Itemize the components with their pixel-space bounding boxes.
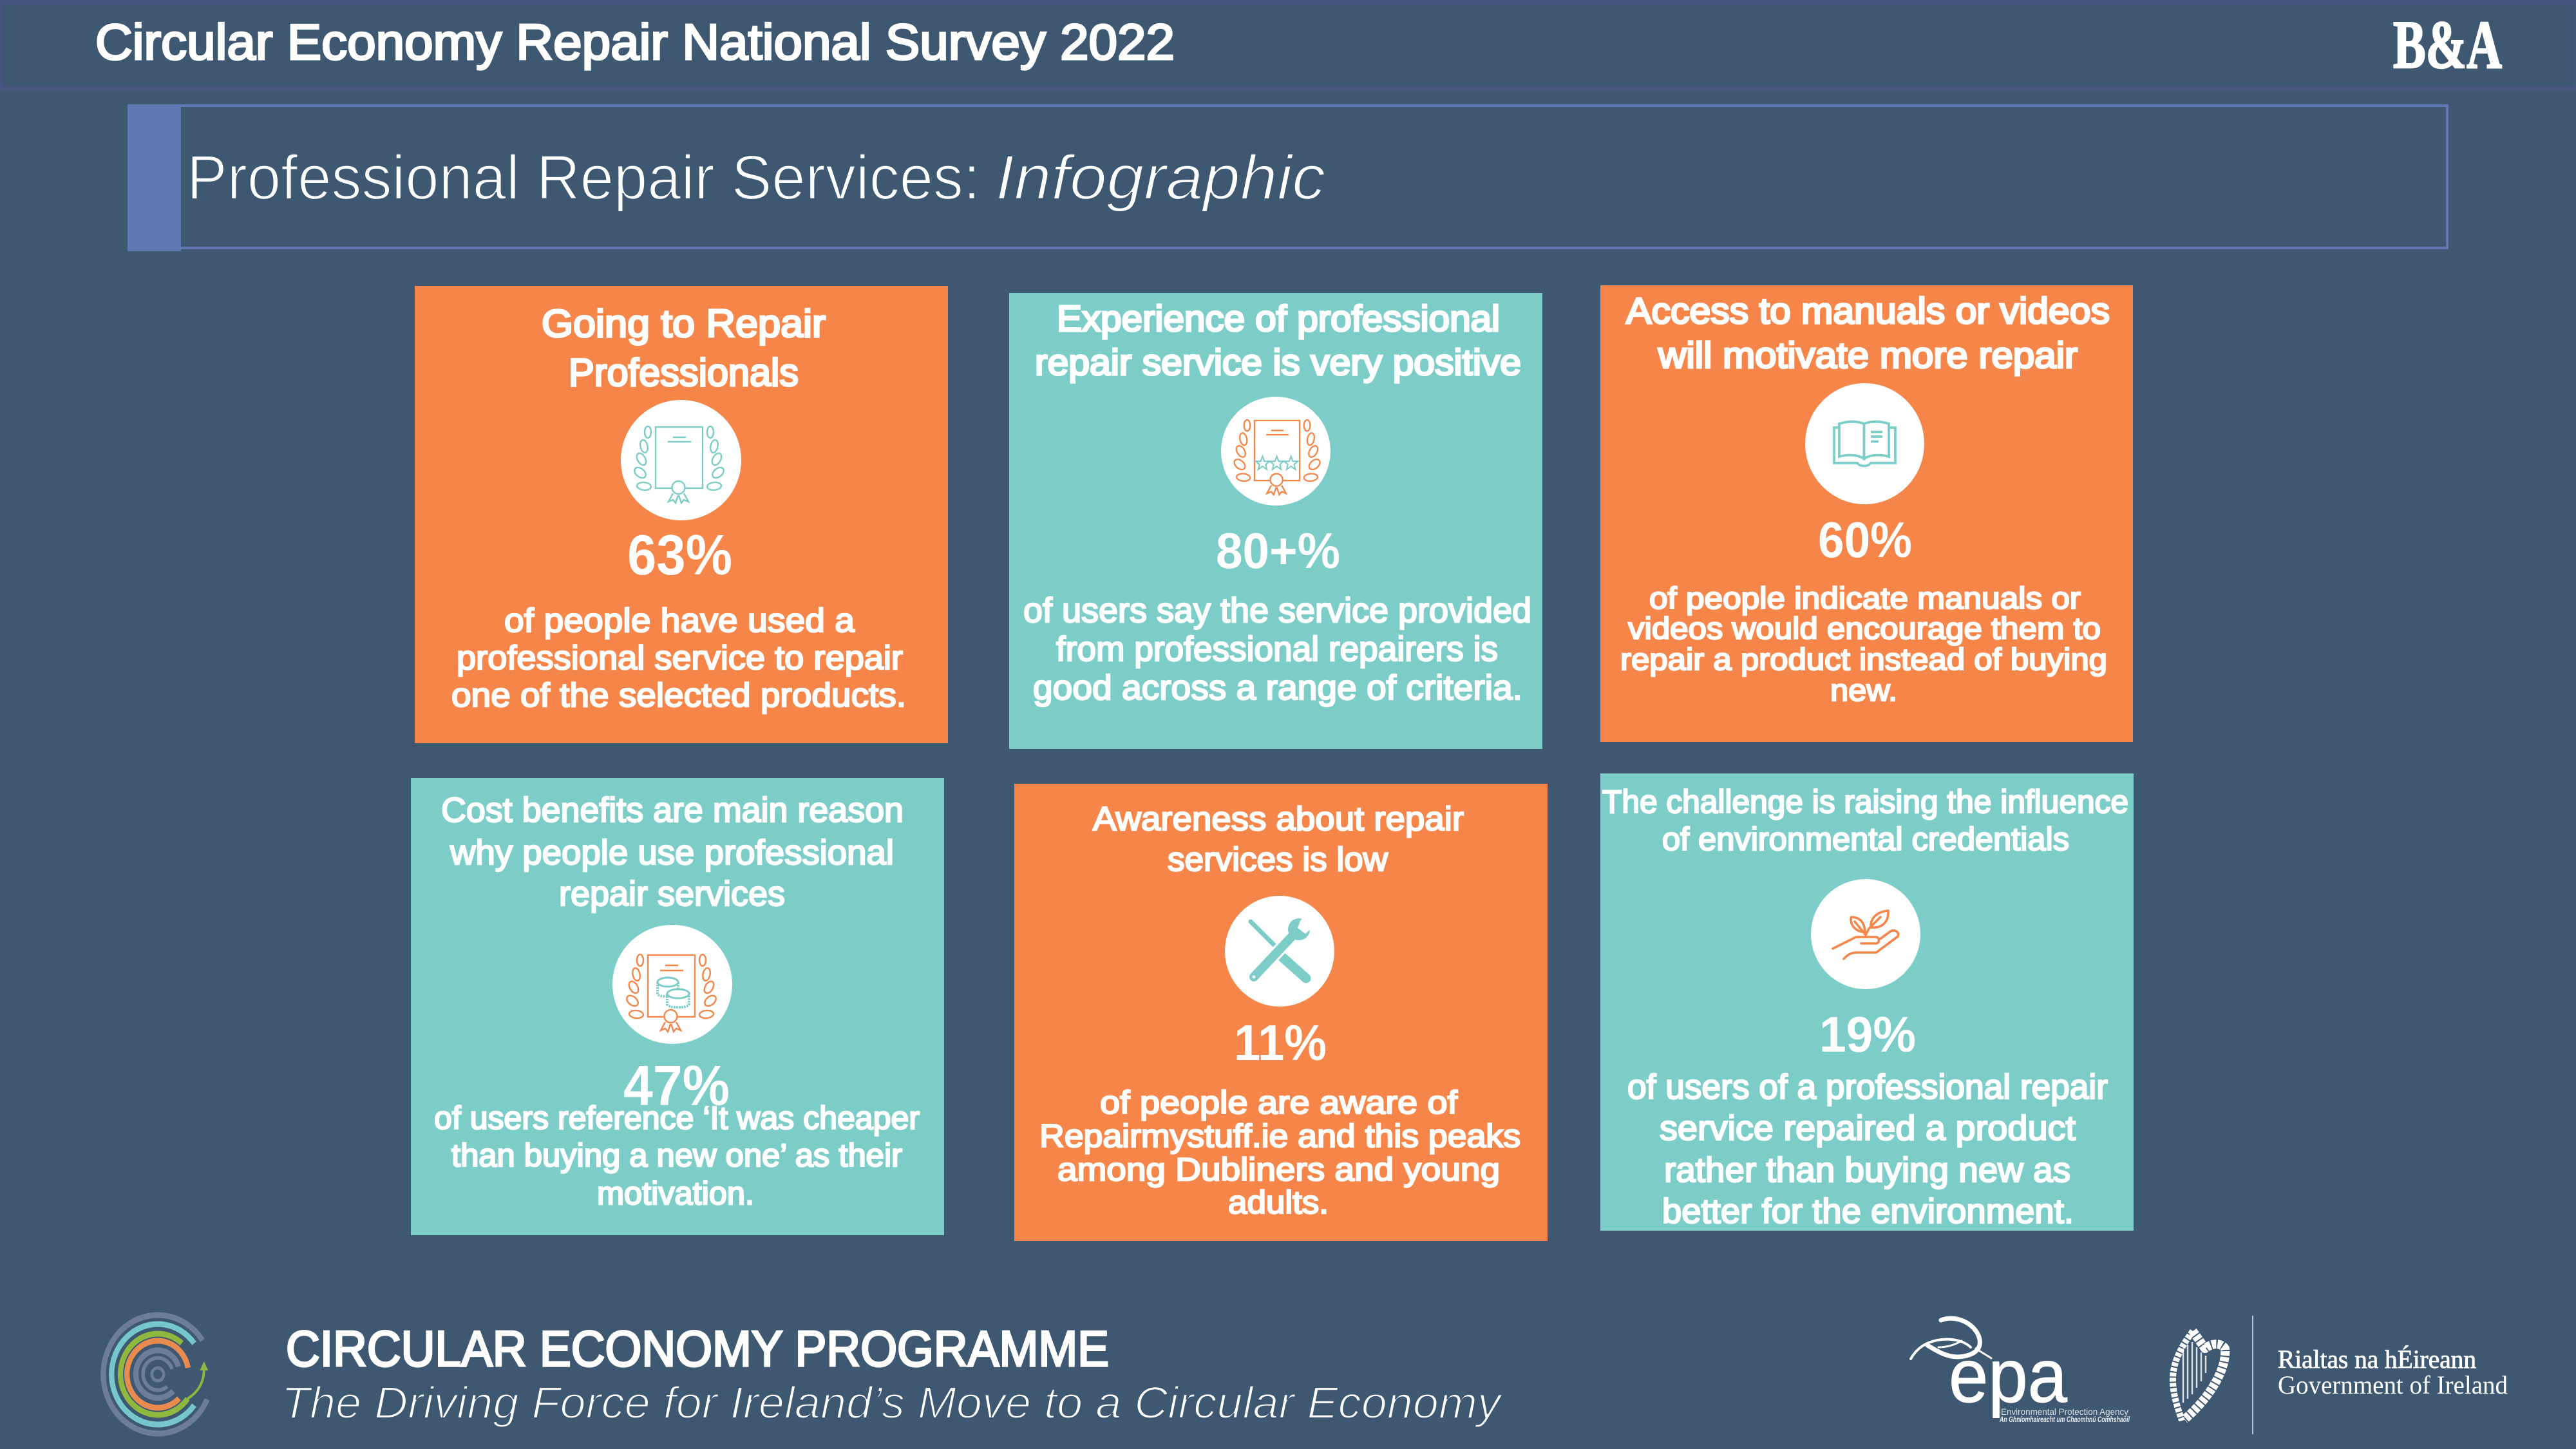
heading [1093, 800, 1464, 878]
heading [1035, 298, 1521, 383]
heading [441, 791, 904, 913]
heading: of environmental credentials [1662, 821, 2069, 857]
description: repair a product instead of buying [1620, 642, 2107, 676]
heading: why people use professional [450, 833, 894, 872]
description: from professional repairers is [1056, 630, 1498, 668]
stat: 63%: 63% [627, 523, 732, 587]
icon: hand holding seedling [1811, 879, 1920, 989]
government of ireland wordmark: Government of Ireland [2278, 1370, 2508, 1399]
divider [2252, 1316, 2253, 1434]
logo: circular economy programme rings [103, 1315, 208, 1434]
description: of users of a professional repair [1627, 1068, 2108, 1106]
description: than buying a new one’ as their [451, 1137, 902, 1173]
government of ireland wordmark [2278, 1345, 2508, 1399]
government of ireland wordmark: Rialtas na hÉireann [2278, 1345, 2476, 1374]
panel: going to repair professionals [415, 286, 948, 743]
logo: epa: Environmental Protection Agency [2001, 1406, 2128, 1417]
header bar [0, 0, 2576, 90]
heading: repair service is very positive [1035, 342, 1521, 383]
description: one of the selected products. [451, 677, 906, 714]
stat: 60%: 60% [1818, 511, 1912, 568]
programme tagline: The Driving Force for Ireland’s Move to a Circular Economy [281, 1378, 1503, 1428]
icon: open book [1805, 383, 1924, 504]
logo: harp [2173, 1331, 2225, 1421]
description: of people indicate manuals or [1649, 581, 2081, 615]
panel: cost benefits [411, 778, 944, 1235]
stat: 80+%: 80+% [1216, 522, 1340, 579]
description: new. [1830, 673, 1897, 707]
logo: epa: An Ghníomhaireacht um Chaomhnú Comhshaoil [1999, 1415, 2130, 1424]
description: videos would encourage them to [1628, 611, 2101, 645]
description: rather than buying new as [1664, 1151, 2070, 1189]
logo: epa: epa [1949, 1334, 2067, 1419]
section title band [128, 104, 2447, 251]
description: of people have used a [504, 602, 855, 639]
description: of users say the service provided [1023, 591, 1531, 630]
heading: Cost benefits are main reason [441, 791, 904, 829]
description: motivation. [597, 1175, 754, 1211]
description [1039, 1084, 1520, 1220]
description [1627, 1068, 2108, 1231]
heading: Professionals [569, 351, 799, 394]
icon: certificate with stars [1221, 397, 1331, 506]
heading: services is low [1168, 841, 1388, 878]
description [451, 602, 906, 714]
description: professional service to repair [457, 639, 903, 677]
heading: Awareness about repair [1093, 800, 1464, 838]
icon: certificate with laurel [621, 400, 741, 520]
footer [103, 1315, 2508, 1434]
icon: certificate with coins [612, 925, 732, 1044]
heading [1626, 290, 2110, 376]
panel: environmental credentials [1600, 773, 2134, 1231]
panel: awareness about repair services [1014, 784, 1548, 1241]
heading: will motivate more repair [1658, 335, 2078, 376]
description [1620, 581, 2107, 707]
description: adults. [1228, 1184, 1329, 1220]
stat: 19%: 19% [1819, 1006, 1916, 1063]
description: better for the environment. [1662, 1192, 2074, 1231]
panel: access to manuals or videos [1600, 285, 2133, 742]
description: among Dubliners and young [1057, 1151, 1500, 1188]
description: service repaired a product [1660, 1109, 2076, 1148]
panel: experience of professional repair [1009, 293, 1542, 749]
section title: Infographic [996, 142, 1325, 213]
heading [542, 302, 826, 394]
stat: 11%: 11% [1234, 1014, 1327, 1071]
heading: The challenge is raising the influence [1602, 784, 2128, 820]
icon: crossed wrench and screwdriver [1225, 896, 1334, 1007]
heading [1602, 784, 2128, 857]
logo: B&A: B&A [2393, 7, 2502, 82]
description: Repairmystuff.ie and this peaks [1039, 1118, 1520, 1154]
section title: Professional Repair Services: [187, 142, 980, 213]
description: of users reference ‘It was cheaper [434, 1100, 920, 1136]
heading: repair services [559, 875, 785, 913]
description: of people are aware of [1100, 1084, 1457, 1121]
report title: Circular Economy Repair National Survey 2022 [95, 14, 1175, 70]
description [1023, 591, 1531, 707]
heading: Going to Repair [542, 302, 826, 345]
description: good across a range of criteria. [1033, 668, 1522, 707]
description [434, 1100, 920, 1211]
programme name: CIRCULAR ECONOMY PROGRAMME [286, 1320, 1109, 1377]
logo: epa [1911, 1318, 2130, 1424]
heading: Experience of professional [1057, 298, 1500, 339]
stat: 47%: 47% [623, 1054, 730, 1117]
heading: Access to manuals or videos [1626, 290, 2110, 332]
